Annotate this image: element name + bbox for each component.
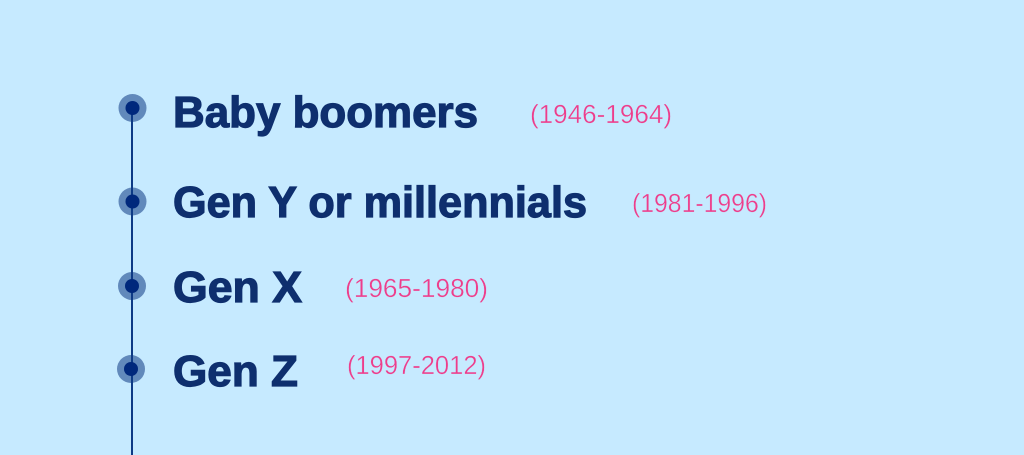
heading: Gen Z: Gen Z — [173, 347, 298, 396]
timeline vertical line — [131, 108, 133, 455]
timeline dot: Gen X — [125, 279, 139, 293]
heading: Gen X: Gen X — [173, 263, 302, 312]
date range: 1997-2012: (1997-2012) — [347, 350, 486, 380]
timeline dot: Gen Z — [124, 362, 138, 376]
date range: 1981-1996: (1981-1996) — [632, 188, 767, 218]
timeline dot: Baby boomers — [126, 101, 140, 115]
timeline dot: Gen Y or millennials — [126, 194, 140, 208]
heading: Baby boomers: Baby boomers — [173, 88, 478, 137]
date range: 1946-1964: (1946-1964) — [530, 99, 672, 129]
timeline marker halos — [117, 94, 146, 383]
heading: Gen Y or millennials: Gen Y or millennials — [173, 178, 587, 227]
date range: 1965-1980: (1965-1980) — [345, 273, 488, 303]
